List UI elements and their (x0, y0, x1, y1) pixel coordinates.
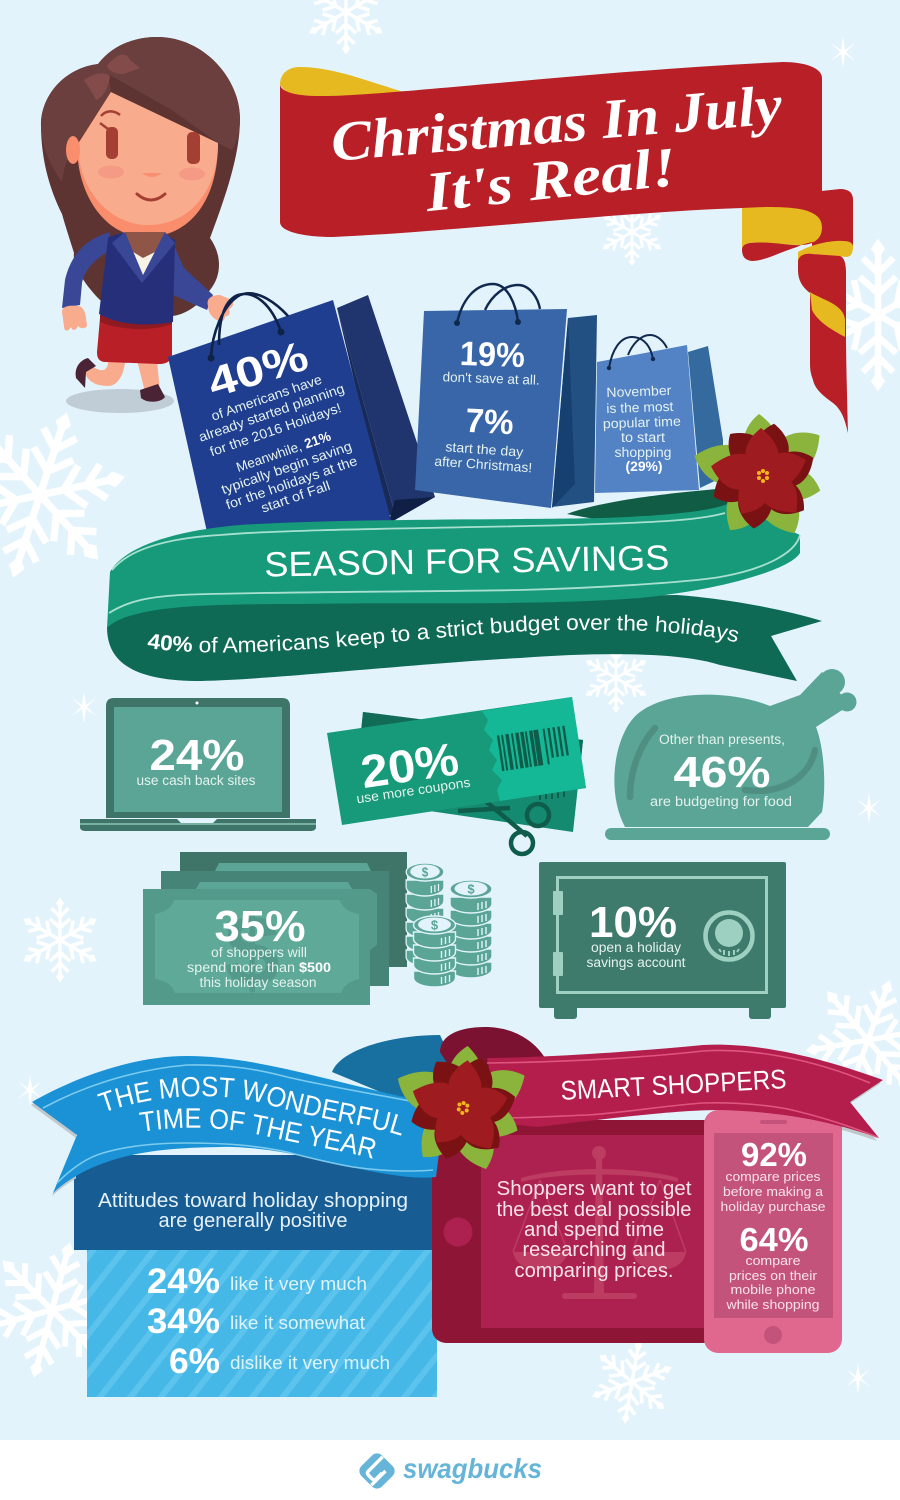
stat: 24 percent like it very much: 24% (147, 1262, 220, 1301)
stat: 34 percent like it somewhat: 34% (147, 1302, 220, 1341)
turkey caption bottom: are budgeting for food (650, 794, 792, 809)
shopping bag: November (595, 335, 723, 493)
subheading: strict budget: 40% of Americans keep to a strict budget over the holidays (148, 614, 738, 652)
coupons with scissors: 20 percent (327, 697, 586, 854)
stat: 6 percent dislike it very much: 6% (169, 1342, 220, 1381)
icon: swagbucks mark (356, 1450, 398, 1492)
title (329, 74, 786, 224)
November caption: is the most (606, 399, 674, 416)
10 percent caption: savings account (586, 955, 686, 970)
stat: 24 percent like it very much (147, 1262, 367, 1301)
7 percent caption: start the day (445, 439, 524, 460)
19 percent figure: 19% (459, 335, 526, 375)
7 percent caption: after Christmas! (434, 454, 533, 475)
64 percent caption: while shopping (725, 1297, 820, 1312)
7 percent caption (434, 439, 533, 475)
stat: 34 percent like it somewhat (147, 1302, 365, 1341)
November caption: popular time (603, 414, 681, 431)
heading: season for savings: SEASON FOR SAVINGS (264, 538, 670, 585)
title: Christmas In July (329, 74, 786, 174)
40 percent caption: typically begin saving (219, 438, 354, 497)
92 percent figure: 92% (741, 1136, 807, 1173)
turkey: 46 percent (605, 669, 856, 840)
40 percent figure: 40% (202, 332, 313, 407)
November caption: (29%) (626, 459, 662, 474)
20 percent figure: 20% (357, 732, 462, 798)
ribbon: title banner (280, 62, 853, 433)
40 percent caption: of Americans have (209, 372, 324, 424)
46 percent figure: 46% (674, 748, 770, 797)
64 percent figure: 64% (740, 1221, 808, 1258)
stat: 6 percent dislike it very much: dislike it very much (230, 1353, 390, 1373)
64 percent caption: compare (746, 1253, 800, 1268)
poinsettia: top (688, 411, 832, 542)
ribbon: smart shoppers (485, 1045, 883, 1141)
phone: 92 and 64 percent (704, 1110, 842, 1353)
92 percent caption: holiday purchase (720, 1199, 826, 1214)
banknotes: 35 percent: $ (224, 895, 280, 1007)
92 percent caption: before making a (723, 1184, 824, 1199)
40 percent caption: for the 2016 Holidays! (208, 400, 343, 459)
panel: attitudes toward holiday shopping (74, 1155, 437, 1397)
heading: smart shoppers: SMART SHOPPERS (560, 1064, 787, 1106)
40 percent caption: Meanwhile, 21% (234, 429, 333, 475)
tablet text: comparing prices. (514, 1260, 674, 1282)
poinsettia: center (380, 1033, 540, 1183)
character: woman with shopping bag (41, 37, 240, 413)
10 percent caption (586, 940, 686, 970)
40 percent caption (197, 372, 359, 516)
laptop: 24 percent (80, 698, 316, 831)
wordmark: swagbucks (403, 1453, 542, 1484)
40 percent caption: already started planning (197, 381, 346, 445)
24 percent figure: 24% (150, 731, 244, 780)
tablet text: researching and (522, 1239, 666, 1261)
November caption: shopping (614, 445, 672, 460)
attitudes text: are generally positive (158, 1210, 348, 1232)
tablet text (496, 1178, 692, 1282)
November caption: November (606, 383, 672, 400)
64 percent caption: mobile phone (730, 1282, 816, 1297)
stat: 24 percent like it very much: like it very much (230, 1274, 367, 1294)
tablet text: the best deal possible (496, 1199, 692, 1221)
64 percent caption: prices on their (729, 1268, 818, 1283)
64 percent caption (725, 1253, 820, 1312)
footer: swagbucks logo (0, 1440, 900, 1500)
35 percent figure: 35% (214, 902, 306, 951)
35 percent caption: spend more than $500 (187, 960, 331, 975)
tablet text: Shoppers want to get (496, 1178, 692, 1200)
19 percent caption: don't save at all. (442, 369, 540, 388)
tablet text: and spend time (524, 1219, 664, 1241)
92 percent caption (720, 1169, 826, 1214)
heading: the most wonderful time of the year: THE MOST WONDERFUL (97, 1076, 402, 1136)
stat: 34 percent like it somewhat: like it somewhat (230, 1313, 365, 1333)
40 percent caption: start of Fall (259, 478, 332, 516)
title: It's Real! (421, 136, 680, 224)
ribbon: most wonderful time of the year (31, 1056, 439, 1196)
November caption: to start (621, 430, 665, 445)
10 percent caption: open a holiday (591, 940, 681, 955)
shopping bag: 19 and 7 percent (415, 284, 597, 508)
turkey caption top: Other than presents, (659, 732, 785, 747)
35 percent caption: this holiday season (200, 975, 316, 990)
November caption (603, 383, 681, 474)
stat: 6 percent dislike it very much (169, 1342, 390, 1381)
35 percent caption (187, 945, 331, 990)
safe: 10 percent (539, 862, 786, 1019)
92 percent caption: compare prices (726, 1169, 821, 1184)
40 percent caption: for the holidays at the (224, 453, 359, 512)
tablet: smart shoppers (432, 1120, 717, 1343)
20 percent caption: use more coupons (355, 775, 472, 806)
35 percent caption: of shoppers will (211, 945, 307, 960)
attitudes text: Attitudes toward holiday shopping (98, 1190, 408, 1212)
heading: the most wonderful time of the year: TIME OF THE YEAR (139, 1108, 376, 1159)
attitudes text (98, 1190, 408, 1232)
ribbon: season for savings (107, 489, 822, 681)
banknotes: 35 percent (143, 852, 407, 1007)
24 percent caption: use cash back sites (136, 773, 256, 788)
icon: coin stacks (406, 863, 492, 987)
10 percent figure: 10% (589, 898, 677, 947)
ribbon backs: blue oval and maroon loop (332, 1027, 545, 1100)
7 percent figure: 7% (465, 402, 515, 442)
shopping bag: 40 percent (168, 293, 435, 532)
